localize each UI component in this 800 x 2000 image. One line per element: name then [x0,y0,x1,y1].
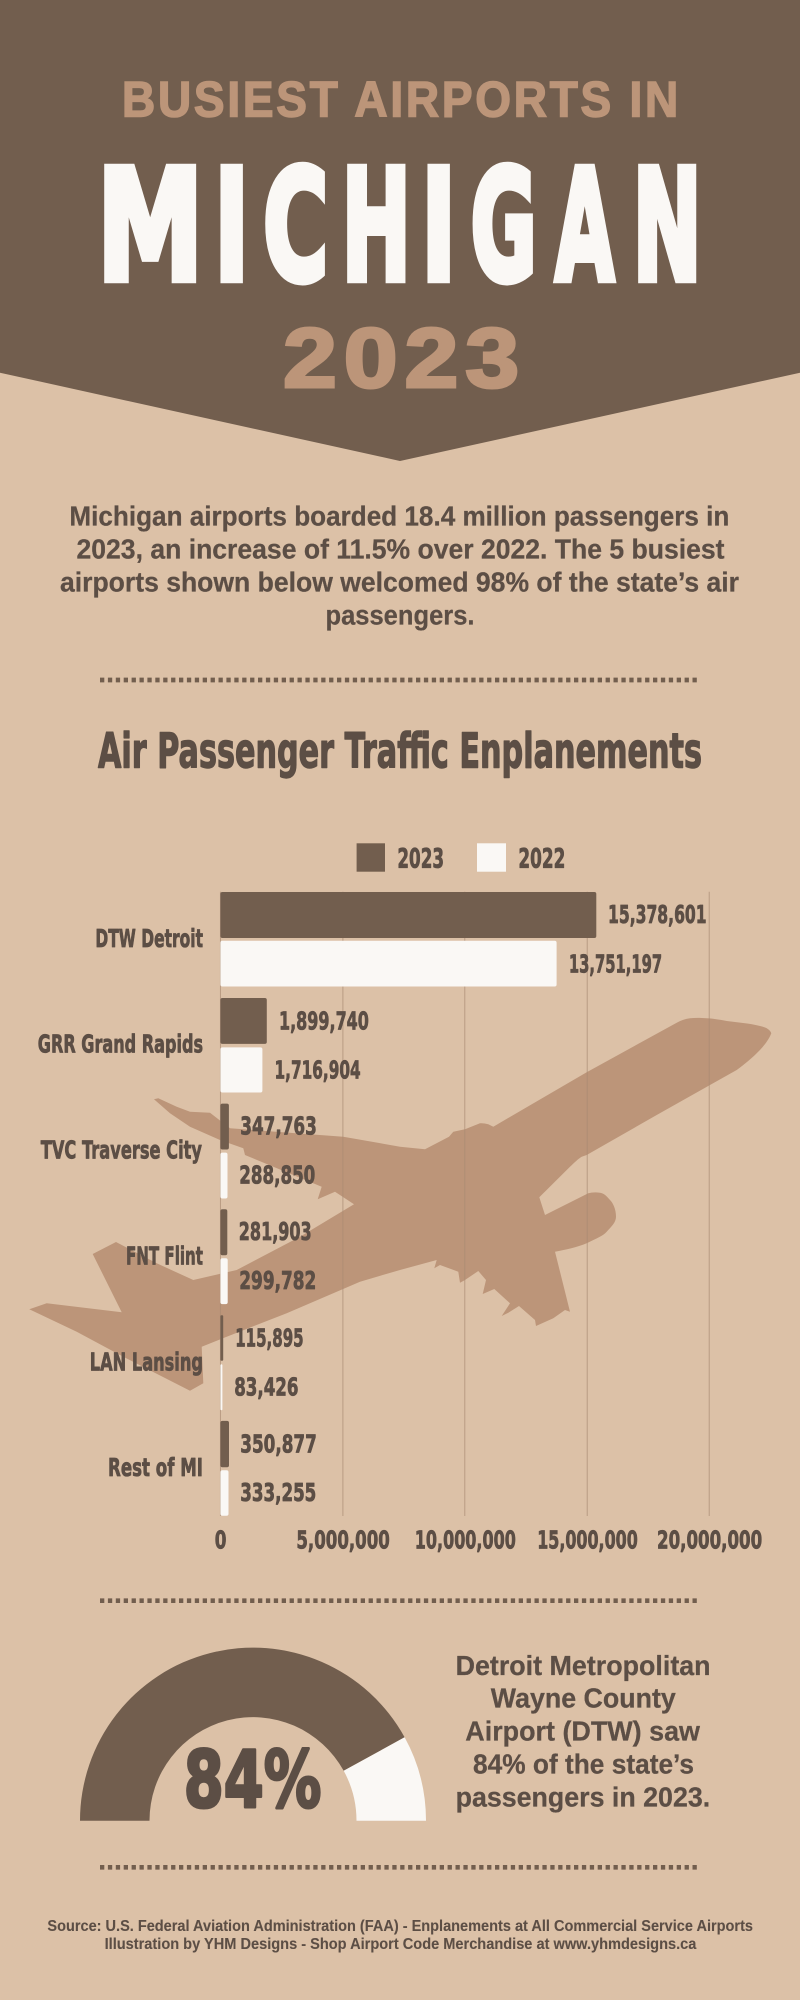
legend item: 2022 [477,843,565,875]
chart x axis labels: 0 [215,1526,226,1555]
airport group: TVC Traverse City: TVC Traverse City [41,1136,202,1165]
airport group: DTW Detroit: 13,751,197 [569,949,662,978]
airport group: FNT Flint: 299,782 [239,1266,316,1295]
title: Michigan: G [471,138,537,316]
title: Michigan: C [263,139,328,316]
illustration: airplane silhouette [29,1018,771,1391]
airport group: DTW Detroit: DTW Detroit [95,924,203,953]
gauge chart: DTW share 84% [80,1648,426,1826]
callout: Detroit share text: Wayne County [491,1683,676,1714]
callout: Detroit share text: passengers in 2023. [456,1782,710,1813]
title: Michigan: N [633,137,702,315]
airport group: FNT Flint: FNT Flint [126,1242,203,1271]
title: Michigan: A [555,139,614,316]
panel: header banner [0,0,800,461]
chart x axis labels [215,1526,762,1555]
callout: Detroit share text: 84% of the state’s [473,1748,694,1779]
airport group: Rest of MI [108,1421,317,1516]
intro text block: passengers. [326,600,474,631]
airport group: Rest of MI: Rest of MI [108,1453,203,1482]
title: Michigan: H [342,137,411,315]
airport group: GRR Grand Rapids: 1,899,740 [279,1006,369,1036]
intro text block [60,501,739,631]
legend item: 2023 [357,843,444,875]
callout: Detroit share text [456,1650,711,1813]
title line: Busiest Airports In: BUSIEST AIRPORTS IN [122,72,681,128]
airport group: TVC Traverse City: 288,850 [239,1160,315,1189]
chart x axis labels: 10,000,000 [415,1526,516,1555]
airport group: TVC Traverse City [41,1104,317,1198]
callout: Detroit share text: Airport (DTW) saw [465,1716,701,1747]
airport group: GRR Grand Rapids: GRR Grand Rapids [38,1029,203,1058]
airport group: Rest of MI: 350,877 [240,1429,317,1458]
source credits: Source: U.S. Federal Aviation Administration (FAA) - Enplanements at All Commercial Service Airports [47,1918,753,1935]
airport group: LAN Lansing [90,1315,304,1410]
airport group: FNT Flint: 281,903 [239,1217,312,1246]
bar chart: enplanements by airport [38,892,762,1555]
chart gridlines [220,892,709,1516]
intro text block: Michigan airports boarded 18.4 million passengers in [69,501,729,532]
gauge value: 84% [184,1736,321,1826]
title: Michigan [97,137,702,316]
airport group: LAN Lansing: 115,895 [235,1323,304,1352]
chart x axis labels: 15,000,000 [537,1526,638,1555]
airport group: DTW Detroit [95,892,707,986]
airport group: GRR Grand Rapids [38,998,369,1092]
callout: Detroit share text: Detroit Metropolitan [456,1650,711,1681]
chart x axis labels: 5,000,000 [296,1526,390,1555]
airport group: FNT Flint [126,1209,316,1304]
airport group: GRR Grand Rapids: 1,716,904 [274,1055,361,1084]
legend item: 2022: 2022 [518,844,565,875]
airport group: LAN Lansing: 83,426 [234,1372,298,1401]
airport group: LAN Lansing: LAN Lansing [90,1348,203,1377]
source credits [47,1918,753,1953]
title: Michigan: M [97,139,203,316]
intro text block: airports shown below welcomed 98% of the state’s air [60,567,739,598]
airport group: TVC Traverse City: 347,763 [240,1112,317,1141]
intro text block: 2023, an increase of 11.5% over 2022. The 5 busiest [76,534,724,565]
chart legend [357,843,565,875]
title: Michigan: I [421,137,456,316]
legend item: 2023: 2023 [397,844,444,875]
title: Michigan: I [214,137,249,316]
airport group: DTW Detroit: 15,378,601 [608,900,707,929]
airport group: Rest of MI: 333,255 [240,1478,316,1507]
source credits: Illustration by YHM Designs - Shop Airport Code Merchandise at www.yhmdesigns.ca [105,1936,697,1953]
title year: 2023: 2023 [283,310,526,405]
